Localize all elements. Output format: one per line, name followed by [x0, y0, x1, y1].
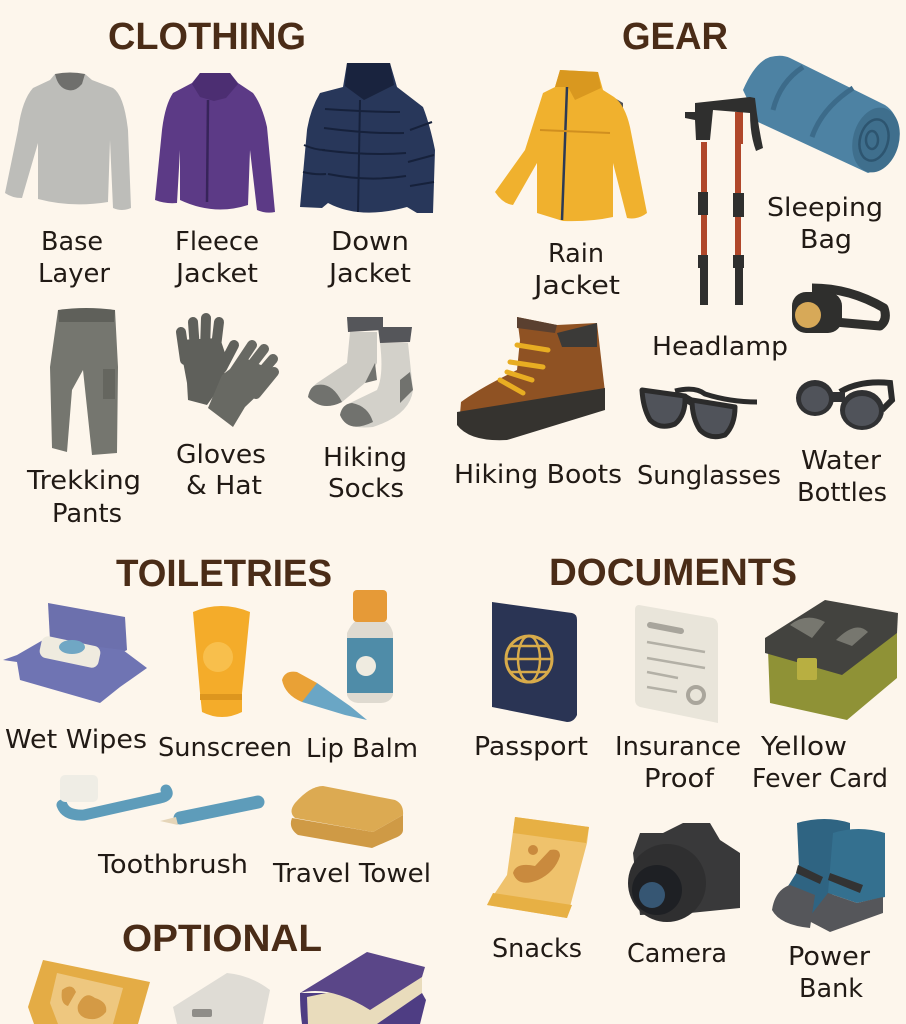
icon: yellow fever card [765, 600, 898, 720]
heading: optional: OPTIONAL [122, 918, 322, 960]
label: insurance: Insurance [615, 732, 741, 762]
icon: sunglasses 1 [642, 389, 757, 437]
label: yellow: Yellow [760, 732, 847, 762]
label: toothbrush: Toothbrush [97, 850, 248, 880]
icon: power bank small [173, 973, 270, 1024]
label: water: Water [801, 446, 881, 476]
label: bottles: Bottles [797, 478, 887, 508]
label: layer: Layer [38, 259, 110, 289]
icon: wet wipes [3, 603, 147, 703]
label: fever card: Fever Card [752, 764, 888, 794]
label: rain: Rain [548, 239, 604, 269]
label: wet wipes: Wet Wipes [5, 725, 147, 755]
label: gloves: Gloves [176, 440, 266, 470]
label: lip balm: Lip Balm [306, 734, 418, 764]
icon: down jacket [300, 63, 435, 213]
heading: gear: GEAR [622, 16, 728, 58]
icon: book [300, 952, 426, 1024]
label: sunglasses: Sunglasses [637, 461, 781, 491]
label: headlamp: Headlamp [652, 332, 788, 362]
label: & hat: & Hat [186, 471, 262, 501]
label: power: Power [788, 942, 870, 972]
icon: gloves [179, 318, 277, 427]
icon: snack bar [28, 960, 150, 1024]
icon: fleece jacket [155, 73, 275, 213]
label: hiking boots: Hiking Boots [454, 460, 622, 490]
icon: toothbrush [60, 775, 258, 825]
heading: toiletries: TOILETRIES [116, 553, 332, 595]
label: base: Base [41, 227, 103, 257]
icon: trekking poles [685, 97, 763, 305]
label: pants: Pants [52, 499, 122, 529]
icon: sunscreen [193, 606, 250, 717]
icon: rain jacket [495, 70, 647, 221]
icon: sleeping bag [743, 56, 906, 178]
label: camera: Camera [627, 939, 727, 969]
label: bag: Bag [800, 225, 852, 255]
icon: sunglasses 2 [796, 380, 892, 430]
icon: base layer [5, 72, 131, 210]
icon: snacks [487, 817, 589, 918]
label: passport: Passport [474, 732, 588, 762]
heading: clothing: CLOTHING [108, 16, 306, 58]
icon: passport [492, 602, 577, 722]
icon: trekking pants [50, 308, 118, 455]
label: jacket: Jacket [327, 259, 411, 289]
icon: hiking socks [308, 317, 413, 428]
label: trekking: Trekking [26, 466, 141, 496]
label: sunscreen: Sunscreen [158, 733, 292, 763]
label: proof: Proof [644, 764, 715, 794]
label: snacks: Snacks [492, 934, 582, 964]
label: socks: Socks [328, 474, 404, 504]
icon: headlamp [792, 288, 885, 333]
heading: documents: DOCUMENTS [549, 552, 797, 594]
icon: travel towel [291, 786, 403, 848]
icon: insurance proof [635, 605, 718, 723]
label: fleece: Fleece [175, 227, 259, 257]
icon: camera [628, 823, 740, 922]
label: jacket: Jacket [532, 271, 620, 301]
label: hiking: Hiking [323, 443, 407, 473]
label: bank: Bank [799, 974, 863, 1004]
icon: hiking boots [457, 317, 605, 440]
label: sleeping: Sleeping [767, 193, 883, 223]
icon: power bank [772, 819, 885, 932]
icon: lip balm [282, 672, 367, 720]
label: travel towel: Travel Towel [272, 859, 431, 889]
icon: bottle [347, 590, 393, 703]
label: jacket: Jacket [174, 259, 258, 289]
label: down: Down [331, 227, 409, 257]
